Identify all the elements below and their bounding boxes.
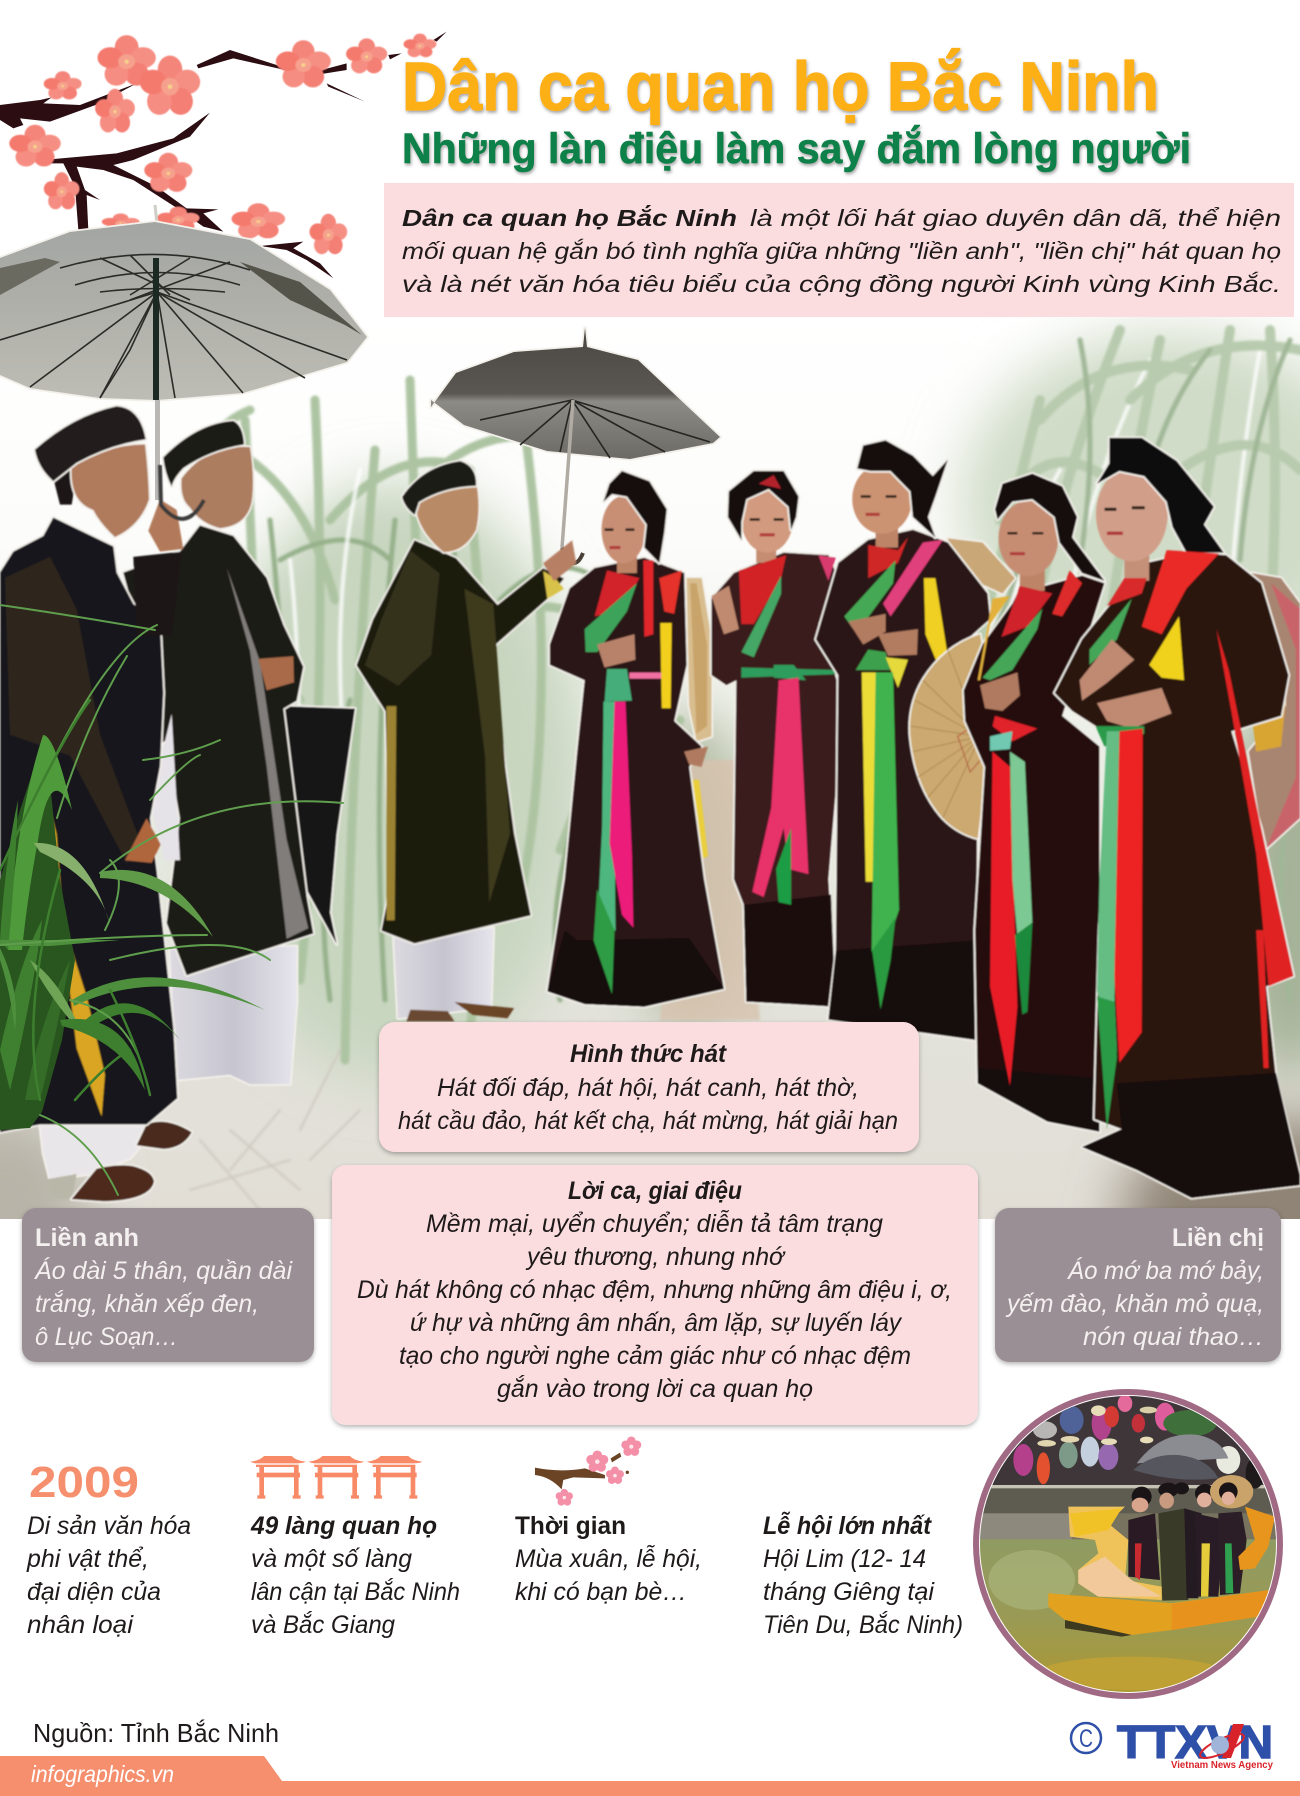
woman 4 dress [964,576,1104,1132]
panel: liền chị: Liền chị [1172,1224,1264,1252]
woman 2 green sash [741,576,781,657]
woman 4 [964,474,1104,1132]
umbrella hook in hand [160,465,204,519]
man 3 trousers [394,928,493,1018]
woman 4 hand [980,673,1020,711]
panel: liền anh: Áo dài 5 thân, quần dài [33,1256,293,1285]
panel: liền anh: ô Lục Soạn… [35,1323,178,1351]
woman 4 tassel [978,596,1010,680]
intro panel: và là nét văn hóa tiêu biểu của cộng đồng người Kinh vùng Kinh Bắc. [402,271,1281,297]
panel: hình thức hát: hát cầu đảo, hát kết chạ, hát mừng, hát giải hạn [398,1107,898,1135]
man 2 inner white panel [150,714,180,860]
foreground grass tuft [0,605,343,1195]
man 2 hand [258,656,294,690]
woman 5 red scarf [1142,550,1219,634]
man 1 brown sleeve [5,557,143,863]
woman 2 blouse [739,555,786,624]
woman 3 hands [848,614,886,644]
big umbrella [0,205,367,400]
conical hat [910,634,990,838]
woman 1 green sash [585,583,637,652]
woman 3 dress [816,530,990,1040]
background scene: misty sugar-cane field [0,317,1300,1300]
title: Dân ca quan họ Bắc Ninh [402,48,1159,125]
woman 1 [547,471,724,1007]
man 3 sleeve highlight [365,551,439,686]
man 1 left foot [47,1174,77,1199]
woman 4 sashes [990,752,1017,1086]
woman 4 scarf [995,474,1104,581]
stat: biggest festival: Tiên Du, Bắc Ninh) [763,1610,963,1639]
woman 3 scarf [857,440,948,537]
woman 1 hands [597,634,635,667]
man 2 trousers [170,947,297,1084]
stat: time: khi có bạn bè… [515,1578,687,1606]
stat: 49 villages: 49 làng quan họ [250,1512,437,1540]
woman 5 yellow fringe [1149,616,1184,680]
woman 1 dress [547,558,724,1007]
panel: liền anh: trắng, khăn xếp đen, [35,1289,259,1318]
panel: lời ca, giai điệu: yêu thương, nhung nhớ [525,1243,786,1271]
stat: 2009: phi vật thể, [26,1545,149,1573]
stone embankment [972,1487,1288,1515]
stat: 49 villages: và Bắc Giang [251,1610,395,1639]
woman 5 blouse [1107,578,1147,606]
man 1 sandals [137,1122,192,1149]
man 3 face [417,482,478,552]
woman 2 scarf [728,471,799,540]
woman 1 belt [629,673,662,679]
woman 1 sashes [597,702,616,938]
man 1 face [72,444,149,537]
footer bar: infographics.vn [31,1761,174,1787]
stat: time [515,1512,702,1606]
stat: 2009: nhân loại [27,1611,135,1639]
woman 3 sashes [862,673,881,882]
TTXVN logo: TTXVN [1117,1716,1273,1768]
woman 1 tassel 2 [690,780,708,859]
panel: liền chị [995,1208,1281,1362]
panel: liền anh: Liền anh [35,1224,139,1252]
woman 3 hat behind [948,538,1015,593]
woman 4 blouse [1001,586,1052,637]
woman 4 knots [993,716,1037,741]
liền anh: man 2 [123,421,355,1084]
man 1 trousers [40,1124,158,1179]
woman 3 [816,440,1015,1040]
panel: liền chị: nón quai thao… [1083,1323,1264,1351]
footer bar [0,1756,1300,1796]
singers [1128,1475,1253,1601]
man 3 cuff [543,571,564,599]
stat: 2009 [26,1458,191,1639]
woman 2 face [741,486,793,563]
man 3 robe [357,540,564,943]
woman 5 face [1096,467,1168,581]
woman 3 pink sash [883,540,943,616]
stat: 49 villages [250,1512,460,1639]
man 3 sandals [406,1010,454,1021]
panel: liền anh [22,1208,314,1362]
panel: lời ca, giai điệu: ứ hự và những âm nhấn, âm lặp, sự luyến láy [410,1309,902,1337]
stat: 2009: 2009 [29,1458,139,1507]
intro panel: Dân ca quan họ Bắc Ninh [402,204,737,231]
panel: liền chị: Áo mớ ba mớ bảy, [1066,1256,1264,1285]
woman 1 tassel [660,623,672,708]
man 1 raised hand [148,499,183,552]
dragon head [1068,1507,1162,1600]
woman 5 hands [1080,639,1134,701]
stat: biggest festival: tháng Giêng tại [763,1578,935,1606]
liền anh: man 3 [357,461,576,1021]
copyright symbol [1071,1723,1101,1753]
cherry blossom branch [0,32,447,278]
stat: 2009: đại diện của [27,1578,161,1606]
man 2 folded umbrella [278,706,355,944]
icon: blossom branch [535,1436,641,1506]
man 3 hat [402,461,476,515]
panel: hình thức hát: Hát đối đáp, hát hội, hát canh, hát thờ, [437,1074,859,1102]
panel: lời ca, giai điệu: Mềm mại, uyển chuyển; diễn tả tâm trạng [426,1209,883,1238]
stat: time: Thời gian [515,1512,626,1540]
man 2 grey lapel [227,567,308,939]
big umbrella pole [153,258,160,500]
icon: three village gates [250,1456,422,1499]
panel: lời ca, giai điệu: Lời ca, giai điệu [568,1177,742,1205]
stat: 2009: Di sản văn hóa [27,1512,191,1540]
intro panel [384,183,1294,317]
stat: biggest festival: Hội Lim (12- 14 [763,1545,926,1573]
crowd [992,1396,1264,1485]
liền anh: man 1 [0,406,192,1201]
woman 3 green sash [844,560,896,629]
stat: 49 villages: lân cận tại Bắc Ninh [251,1577,460,1606]
stat: biggest festival [763,1511,963,1639]
liền chị: women group [547,438,1300,1198]
man 2 face [181,447,253,528]
man 1 raised arm [133,552,182,635]
woman 2 dress [711,553,843,1007]
stat: biggest festival: Lễ hội lớn nhất [763,1511,933,1540]
woman 3 blouse [868,537,908,578]
stat: 49 villages: và một số làng [251,1545,412,1573]
copyright symbol: C [1079,1725,1093,1753]
panel: lời ca, giai điệu [332,1165,978,1425]
woman 5 hair and scarf [1097,438,1224,553]
intro panel: là một lối hát giao duyên dân dã, thể hiện [750,205,1281,231]
man 1 robe [0,518,177,1132]
subtitle: Những làn điệu làm say đắm lòng người [402,124,1191,173]
woman 3 tassel [924,578,947,665]
woman 2 pink sash [752,678,808,897]
man 2 robe [123,526,313,975]
liền anh figures [0,406,576,1201]
woman 5 drum [1249,573,1300,851]
TTXVN logo: Vietnam News Agency [1171,1760,1273,1771]
woman 4 green sash [983,609,1042,680]
stat: time: Mùa xuân, lễ hội, [515,1544,702,1573]
woman 3 face [852,464,912,548]
man 1 yellow sash [43,782,105,1117]
boat [1048,1590,1270,1635]
woman 1 neck and face [602,496,645,573]
woman 5 sashes [1097,731,1122,1053]
right dragon tail [1238,1507,1275,1570]
water [980,1536,1276,1692]
intro panel: mối quan hệ gắn bó tình nghĩa giữa những "liền anh", "liền chị" hát quan họ [402,238,1281,264]
panel: hình thức hát [379,1022,919,1152]
black umbrellas [1137,1434,1228,1463]
small umbrella [431,328,720,563]
man 2 hat [163,421,244,486]
man 3 yellow edge [386,706,396,920]
woman 3 belt knot [856,650,891,670]
woman 1 blouse [595,571,639,616]
woman 2 hand [711,586,739,634]
woman 1 drum [687,578,711,741]
panel: lời ca, giai điệu: gắn vào trong lời ca quan họ [497,1374,813,1403]
man 1 hair [53,444,110,505]
panel: lời ca, giai điệu: Dù hát không có nhạc đệm, nhưng những âm điệu i, ơ, [357,1276,952,1304]
woman 2 [711,471,843,1007]
woman 4 face [998,501,1058,591]
panel: liền chị: yếm đào, khăn mỏ quạ, [1005,1290,1264,1318]
man 1 lower hand [125,818,161,863]
woman 5 dress [1055,553,1300,1198]
festival photo circle [972,1390,1288,1703]
woman 1 red ribbon [643,560,653,637]
panel: hình thức hát: Hình thức hát [570,1040,728,1068]
woman 5 knot [1095,726,1144,747]
man 1 hat [35,406,146,481]
woman 1 scarf [604,471,667,563]
woman 2 belt [741,667,838,678]
man 3 hand [543,540,576,581]
woman 5 [1055,438,1300,1198]
woman 5 side strip [1216,629,1293,986]
source: Nguồn: Tỉnh Bắc Ninh [33,1718,279,1748]
panel: lời ca, giai điệu: tạo cho người nghe cảm giác như có nhạc đệm [399,1342,911,1370]
